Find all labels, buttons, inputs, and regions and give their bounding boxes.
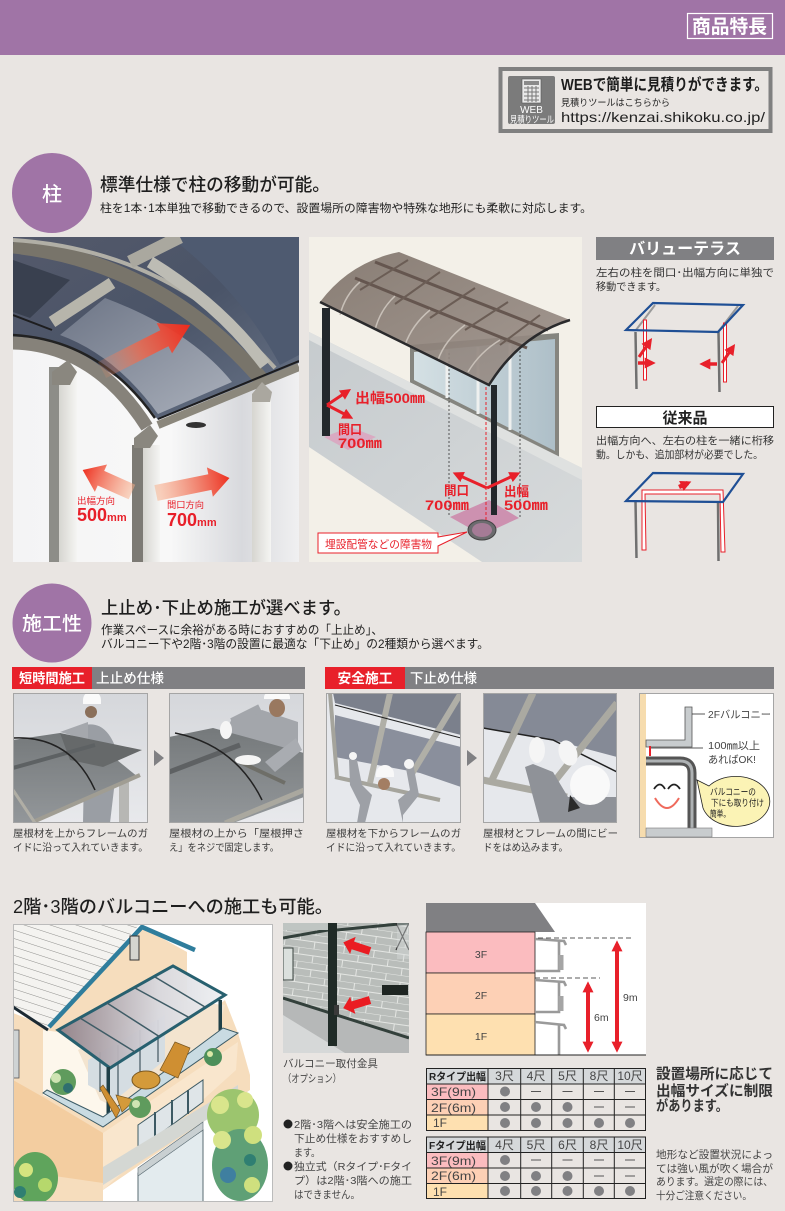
diagram: building floor heights: 6m bbox=[594, 1012, 609, 1024]
table: R type: 1F bbox=[433, 1116, 447, 1130]
table: R type: 10尺 bbox=[617, 1069, 643, 1083]
caption: step three: イドに沿って入れていきます。 bbox=[326, 842, 461, 854]
table: F type: 10尺 bbox=[617, 1138, 643, 1152]
notes: balcony installation: 2階･3階へは安全施工の bbox=[294, 1118, 412, 1131]
panel: conventional product bbox=[596, 406, 775, 461]
table: R type: 4尺 bbox=[527, 1069, 545, 1083]
illustration: house with balcony terrace bbox=[12, 924, 273, 1204]
caption: step three: 屋根材を下からフレームのガ bbox=[326, 827, 461, 840]
photo: pillar close-up: 700mm bbox=[167, 510, 217, 530]
text: wind caution: あります。選定の際には、 bbox=[656, 1175, 773, 1188]
panel: under-balcony clearance diagram: 100㎜以上 bbox=[708, 740, 760, 752]
photo: balcony mounting bracket bbox=[283, 923, 409, 1053]
panel: value terrace bbox=[596, 237, 774, 293]
panel: conventional product: 従来品 bbox=[662, 410, 708, 427]
panel: under-balcony clearance diagram: あればOK! bbox=[708, 754, 756, 766]
notes: balcony installation: プ）は2階･3階への施工 bbox=[294, 1174, 412, 1187]
panel: conventional product: 出幅方向へ、左右の柱を一緒に桁移 bbox=[596, 434, 775, 447]
table: R type: Rタイプ出幅 bbox=[429, 1070, 486, 1083]
text: size restriction heading: 出幅サイズに制限 bbox=[656, 1082, 773, 1100]
text: size restriction heading bbox=[656, 1066, 773, 1115]
photo: pillar close-up bbox=[13, 237, 299, 562]
bar: bottom mount spec: 安全施工 bbox=[338, 670, 392, 686]
subheading: pillar section: 柱を1本･1本単独で移動できるので、設置場所の障害物や特殊な地形にも柔軟に対応します。 bbox=[100, 201, 592, 215]
bar: top mount spec: 上止め仕様 bbox=[96, 671, 165, 686]
notes: balcony installation: ます。 bbox=[294, 1147, 320, 1159]
notes: balcony installation bbox=[284, 1118, 412, 1201]
header band: 商品特長 bbox=[692, 16, 767, 38]
badge: construction bbox=[12, 584, 92, 662]
photo: fitting bead bbox=[483, 693, 617, 823]
caption: step four: ドをはめ込みます。 bbox=[483, 842, 568, 854]
table: R type: 5尺 bbox=[558, 1069, 577, 1083]
diagram: value terrace pillars bbox=[626, 303, 743, 392]
table: F type: 8尺 bbox=[590, 1138, 608, 1152]
diagram: building floor heights: 2F bbox=[475, 990, 487, 1002]
photo: inserting roof panel from below bbox=[326, 693, 461, 823]
table: F type: 3F(9m) bbox=[431, 1154, 476, 1168]
arrow: step one to two bbox=[154, 750, 164, 766]
table: R type: 8尺 bbox=[590, 1069, 608, 1083]
caption: step two bbox=[169, 827, 304, 854]
diagram: conventional pillars bbox=[626, 473, 743, 561]
text: size restriction heading: 設置場所に応じて bbox=[656, 1066, 773, 1083]
badge: pillar: 柱 bbox=[42, 183, 62, 206]
table: R type: 3F(9m) bbox=[431, 1085, 476, 1099]
photo: terrace pillar move illustration: 700㎜ bbox=[425, 497, 469, 513]
panel: under-balcony clearance diagram: 2Fバルコニー bbox=[708, 709, 771, 721]
diagram: building floor heights: 3F bbox=[475, 949, 487, 961]
web estimate callout: 見積りツール bbox=[510, 114, 554, 126]
table: R type: 3尺 bbox=[495, 1069, 514, 1083]
subheading: construction section: バルコニー下や2階･3階の設置に最適な「下止め」の2種類から選べます。 bbox=[101, 637, 489, 651]
panel: under-balcony clearance diagram: バルコニーの bbox=[710, 787, 756, 797]
panel: value terrace: バリューテラス bbox=[629, 241, 741, 258]
photo: pillar close-up: 間口方向 bbox=[167, 499, 204, 510]
bar: top mount spec: 短時間施工 bbox=[19, 670, 85, 686]
table: F type: 1F bbox=[433, 1185, 447, 1199]
photo: pillar close-up: 出幅方向 bbox=[77, 495, 115, 506]
table: R type bbox=[426, 1068, 646, 1131]
panel: under-balcony clearance diagram: 簡単。 bbox=[710, 808, 730, 819]
notes: balcony installation: はできません。 bbox=[294, 1189, 360, 1201]
bar: bottom mount spec: 下止め仕様 bbox=[410, 671, 477, 686]
table: F type: 6尺 bbox=[558, 1138, 577, 1152]
photo: terrace pillar move illustration: 間口 bbox=[338, 422, 362, 437]
photo: pillar close-up: 500mm bbox=[77, 505, 127, 525]
photo: terrace pillar move illustration: 出幅 bbox=[504, 484, 529, 499]
photo: terrace pillar move illustration: 間口 bbox=[444, 483, 469, 498]
diagram: building floor heights bbox=[426, 903, 646, 1055]
heading: balcony section: 2階･3階のバルコニーへの施工も可能。 bbox=[13, 897, 333, 917]
caption: step two: え」をネジで固定します。 bbox=[169, 842, 279, 854]
panel: under-balcony clearance diagram: 下にも取り付け bbox=[711, 798, 764, 808]
text: wind caution: 地形など設置状況によっ bbox=[656, 1148, 773, 1161]
photo: terrace pillar move illustration: 500㎜ bbox=[504, 497, 548, 513]
caption: bracket bbox=[283, 1057, 378, 1085]
photo: terrace pillar move illustration: 埋設配管などの障害物 bbox=[325, 537, 432, 551]
text: wind caution: ては強い風が吹く場合が bbox=[656, 1162, 773, 1175]
table: F type bbox=[426, 1137, 646, 1199]
caption: step one: 屋根材を上からフレームのガ bbox=[13, 827, 148, 840]
table: F type: 5尺 bbox=[527, 1138, 545, 1152]
caption: step three bbox=[326, 827, 461, 854]
header band bbox=[0, 0, 785, 55]
diagram: building floor heights: 9m bbox=[623, 992, 638, 1004]
photo: terrace pillar move illustration bbox=[309, 237, 582, 562]
caption: step four: 屋根材とフレームの間にビー bbox=[483, 827, 618, 840]
photo: terrace pillar move illustration: 出幅500㎜ bbox=[355, 390, 425, 406]
photo: terrace pillar move illustration: 700㎜ bbox=[338, 435, 382, 451]
photo: fixing roof holder with screw bbox=[169, 690, 304, 823]
text: wind caution: 十分ご注意ください。 bbox=[656, 1189, 752, 1202]
panel: value terrace: 移動できます。 bbox=[596, 280, 666, 293]
web estimate callout: https://kenzai.shikoku.co.jp/ bbox=[561, 109, 765, 125]
text: wind caution bbox=[656, 1148, 773, 1202]
notes: balcony installation: 下止め仕様をおすすめし bbox=[294, 1132, 412, 1145]
text: size restriction heading: があります。 bbox=[656, 1097, 728, 1115]
table: F type: 2F(6m) bbox=[431, 1169, 476, 1183]
notes: balcony installation: 独立式（Rタイプ･Fタイ bbox=[294, 1160, 412, 1173]
panel: conventional product: 動。しかも、追加部材が必要でした。 bbox=[596, 448, 763, 461]
arrow: step three to four bbox=[467, 750, 477, 766]
diagram: building floor heights: 1F bbox=[475, 1031, 487, 1043]
table: F type: Fタイプ出幅 bbox=[429, 1139, 486, 1152]
caption: bracket: （オプション） bbox=[283, 1073, 341, 1085]
web estimate callout: 見積りツールはこちらから bbox=[561, 97, 670, 109]
table: F type: 4尺 bbox=[495, 1138, 514, 1152]
caption: step one bbox=[13, 827, 148, 854]
subheading: construction section: 作業スペースに余裕がある時におすすめの「上止め」、 bbox=[101, 622, 383, 637]
panel: value terrace: 左右の柱を間口･出幅方向に単独で bbox=[596, 266, 774, 279]
bar: top mount spec bbox=[12, 667, 305, 689]
caption: step one: イドに沿って入れていきます。 bbox=[13, 842, 148, 854]
badge: construction: 施工性 bbox=[22, 613, 82, 635]
heading: pillar section: 標準仕様で柱の移動が可能。 bbox=[100, 174, 330, 195]
subheading: construction section bbox=[101, 622, 489, 651]
web estimate callout: WEB bbox=[520, 105, 543, 116]
bar: bottom mount spec bbox=[325, 667, 774, 689]
table: R type: 2F(6m) bbox=[431, 1101, 476, 1115]
heading: construction section: 上止め･下止め施工が選べます。 bbox=[101, 598, 351, 618]
panel: under-balcony clearance diagram bbox=[640, 694, 774, 838]
caption: step four bbox=[483, 827, 618, 854]
badge: pillar bbox=[12, 153, 92, 233]
web estimate callout bbox=[500, 69, 770, 131]
caption: bracket: バルコニー取付金具 bbox=[283, 1057, 378, 1070]
caption: step two: 屋根材の上から「屋根押さ bbox=[169, 827, 304, 840]
photo: inserting roof panel from above bbox=[13, 691, 148, 823]
